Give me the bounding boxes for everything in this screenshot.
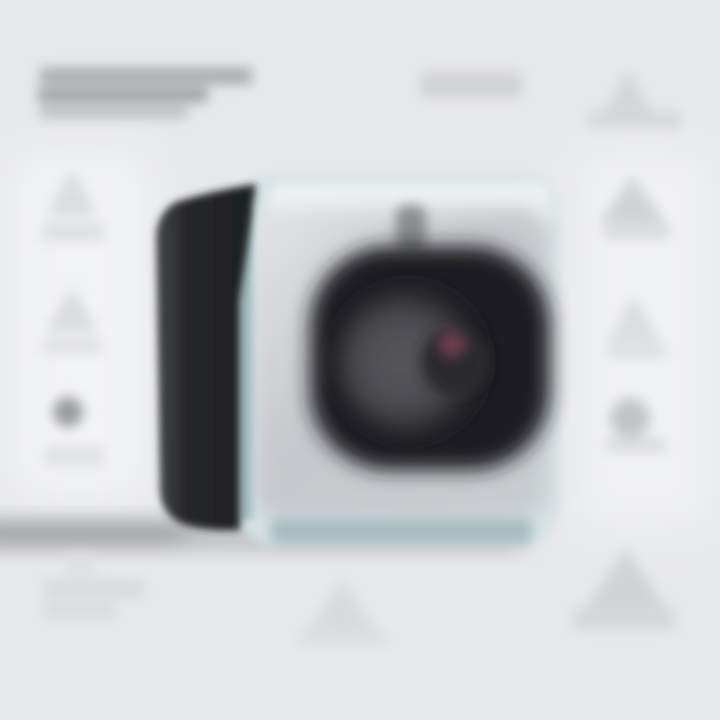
ground shadow [0,520,520,550]
camera top knob [396,206,426,252]
icon: right item one [600,176,670,238]
camera dark side [156,184,256,530]
icon: left item three [44,397,104,467]
icon: bottom centre item [298,578,388,646]
camera bottom strip [270,518,532,544]
lens ring [336,288,484,436]
icon: left item two [42,286,102,354]
camera front face [254,208,548,518]
lens housing [310,246,550,470]
camera teal inner edge [240,210,252,520]
camera [156,174,558,546]
camera white top face [270,182,550,232]
icon: right item two [608,294,666,358]
icon: bottom right item [574,548,674,630]
camera pale body outline [240,174,558,546]
icon: right item three [606,398,666,452]
icon: top right triangle [588,70,680,128]
icon: left item one [42,168,104,242]
heading [38,68,252,118]
lens inner [421,328,489,396]
top centre label [420,72,522,98]
lens highlight [438,330,466,358]
icon: bottom left item [44,556,144,618]
